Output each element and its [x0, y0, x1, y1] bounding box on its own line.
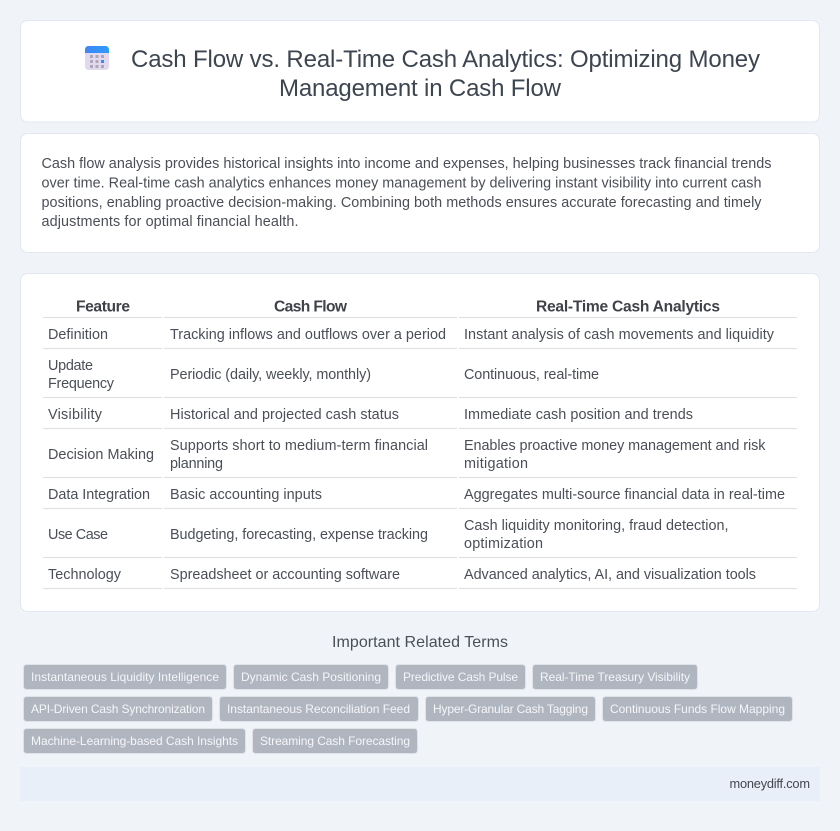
- title: [131, 46, 760, 102]
- tag group: related terms: Machine-Learning-based Cash Insights: [31, 734, 238, 748]
- title: Cash Flow vs. Real-Time Cash Analytics: Optimizing Money: [131, 46, 760, 73]
- row: definition: [48, 327, 775, 343]
- tag group: related terms: Instantaneous Liquidity Intelligence: [31, 670, 219, 684]
- row: visibility: [48, 407, 693, 423]
- heading: related terms: Important Related Terms: [332, 634, 508, 651]
- panel: comparison table: [20, 274, 820, 612]
- intro text: adjustments for optimal financial health.: [42, 214, 298, 230]
- row: decision making: Decision Making: [48, 447, 154, 463]
- table header: [76, 298, 720, 316]
- tag group: related terms: Dynamic Cash Positioning: [241, 670, 381, 684]
- row: technology: Advanced analytics, AI, and visualization tools: [464, 567, 756, 583]
- table header: Feature: [76, 298, 130, 316]
- row: data integration: [48, 487, 785, 503]
- row: technology: Technology: [48, 567, 122, 583]
- row: update frequency: [48, 358, 599, 392]
- tag group: related terms: Continuous Funds Flow Mapping: [610, 702, 785, 716]
- footer: moneydiff.com: [730, 776, 810, 791]
- intro text: positions, enabling proactive decision-making. Combining both methods ensures accurate forecasting and timely: [42, 195, 762, 211]
- row: definition: Instant analysis of cash movements and liquidity: [464, 327, 775, 343]
- row: decision making: Enables proactive money management and risk: [464, 438, 766, 454]
- intro text: over time. Real-time cash analytics enhances money management by delivering instant visibility into current cash: [42, 176, 762, 192]
- table header: Cash Flow: [274, 298, 348, 316]
- row: decision making: Supports short to medium-term financial: [170, 438, 428, 454]
- row: data integration: Aggregates multi-source financial data in real-time: [464, 487, 785, 503]
- row: update frequency: Frequency: [48, 376, 115, 392]
- panel: header: [20, 20, 820, 122]
- tag group: related terms: Predictive Cash Pulse: [403, 670, 518, 684]
- row: use case: Budgeting, forecasting, expense tracking: [170, 527, 428, 543]
- row: use case: optimization: [464, 536, 543, 552]
- tag group: related terms: Instantaneous Reconciliation Feed: [227, 702, 410, 716]
- row: use case: Cash liquidity monitoring, fraud detection,: [464, 518, 728, 534]
- row: definition: Definition: [48, 327, 108, 343]
- row: update frequency: Update: [48, 358, 93, 374]
- row: technology: [48, 567, 756, 583]
- tag group: related terms: Streaming Cash Forecasting: [260, 734, 410, 748]
- row: use case: [48, 518, 728, 552]
- row: data integration: Data Integration: [48, 487, 150, 503]
- intro text: Cash flow analysis provides historical insights into income and expenses, helping businesses track financial trends: [42, 156, 772, 172]
- tag group: related terms: [24, 664, 792, 754]
- tag group: related terms: Hyper-Granular Cash Tagging: [433, 702, 588, 716]
- row: visibility: Visibility: [48, 407, 103, 423]
- table header: Real-Time Cash Analytics: [536, 298, 720, 316]
- row: update frequency: Continuous, real-time: [464, 367, 599, 383]
- footer: [20, 767, 820, 801]
- row: visibility: Immediate cash position and trends: [464, 407, 693, 423]
- row: visibility: Historical and projected cash status: [170, 407, 399, 423]
- row: decision making: mitigation: [464, 456, 528, 472]
- title: Management in Cash Flow: [279, 75, 562, 102]
- row: decision making: planning: [170, 456, 223, 472]
- row: technology: Spreadsheet or accounting software: [170, 567, 400, 583]
- row: update frequency: Periodic (daily, weekly, monthly): [170, 367, 371, 383]
- icon: calendar: [85, 46, 109, 70]
- row: definition: Tracking inflows and outflows over a period: [170, 327, 446, 343]
- row: decision making: [48, 438, 766, 472]
- row: data integration: Basic accounting inputs: [170, 487, 322, 503]
- tag group: related terms: Real-Time Treasury Visibility: [540, 670, 690, 684]
- intro text: [42, 156, 772, 230]
- panel: introduction: [20, 134, 820, 252]
- tag group: related terms: API-Driven Cash Synchronization: [31, 702, 205, 716]
- row: use case: Use Case: [48, 527, 108, 543]
